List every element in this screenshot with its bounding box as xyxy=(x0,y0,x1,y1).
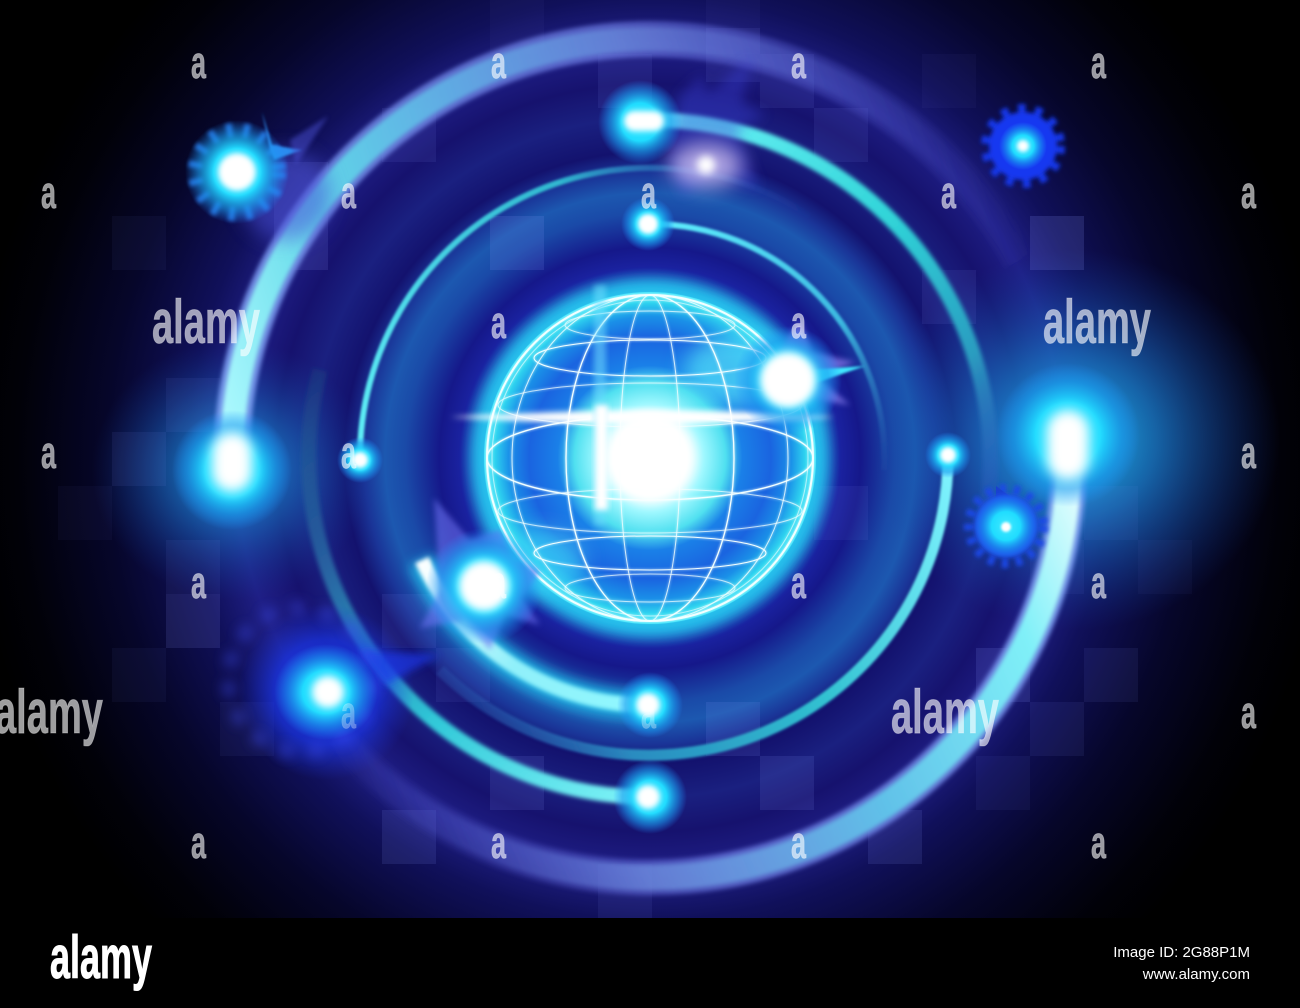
cyan blob toward burst xyxy=(685,335,785,405)
watermark: small letters: a xyxy=(341,427,357,478)
watermark: large alamy words: alamy xyxy=(1043,288,1151,357)
outer arc: upper xyxy=(232,39,1020,470)
node: left outer arc xyxy=(172,410,292,530)
watermark: small letters xyxy=(41,37,1257,868)
watermark: small letters: a xyxy=(491,297,507,348)
wireframe xyxy=(487,295,813,621)
middle arc: upper right xyxy=(660,110,996,486)
watermark: large alamy words: alamy xyxy=(891,678,999,747)
watermark: small letters: a xyxy=(41,427,57,478)
lens flare cross xyxy=(450,285,835,525)
watermark: large alamy words xyxy=(0,288,1151,747)
burst: lens flare near top arc xyxy=(668,57,766,195)
watermark: small letters: a xyxy=(641,167,657,218)
node: right outer arc xyxy=(996,363,1140,507)
watermark: small letters: a xyxy=(191,37,207,88)
watermark: small letters: a xyxy=(1241,427,1257,478)
watermark: small letters: a xyxy=(191,557,207,608)
globe fill xyxy=(484,292,816,624)
watermark: small letters: a xyxy=(191,817,207,868)
watermark: small letters: a xyxy=(1241,167,1257,218)
watermark: large alamy words: alamy xyxy=(0,678,103,747)
watermark: small letters: a xyxy=(491,817,507,868)
node: bottom middle arc xyxy=(613,760,687,834)
watermark: small letters: a xyxy=(1241,687,1257,738)
globe halo xyxy=(472,280,828,636)
footer logo: alamy xyxy=(50,924,152,991)
watermark: small letters: a xyxy=(41,167,57,218)
watermark: small letters: a xyxy=(791,37,807,88)
node: right inner arc xyxy=(925,432,971,478)
watermark: small letters: a xyxy=(941,167,957,218)
watermark: small letters: a xyxy=(791,557,807,608)
burst: right small xyxy=(969,486,1043,563)
inner arc: lower right xyxy=(440,455,948,755)
node: top inner arc xyxy=(621,197,675,251)
watermark: small letters: a xyxy=(641,687,657,738)
burst: bottom left xyxy=(228,604,440,780)
right side cyan haze xyxy=(924,266,1270,612)
footer site url: www.alamy.com xyxy=(1142,966,1250,983)
watermark: small letters: a xyxy=(1091,557,1107,608)
outer arc: lower xyxy=(335,432,1069,878)
left side cyan haze xyxy=(102,357,350,584)
inner arc: upper left xyxy=(356,164,770,449)
watermark: small letters: a xyxy=(1091,817,1107,868)
footer image id: Image ID: 2G88P1M xyxy=(1113,944,1250,961)
burst: lower left of globe xyxy=(420,498,542,650)
cyan blob lower left xyxy=(505,528,585,592)
burst: top right xyxy=(988,111,1058,181)
burst: right of globe xyxy=(734,320,865,434)
inner arc: lower left bright xyxy=(422,560,650,705)
inner arc: upper right xyxy=(648,224,884,470)
watermark: small letters: a xyxy=(341,167,357,218)
watermark: small letters: a xyxy=(1091,37,1107,88)
node: bottom inner arc xyxy=(617,672,683,738)
central star xyxy=(608,416,692,500)
watermark: small letters: a xyxy=(791,297,807,348)
watermark: small letters: a xyxy=(491,37,507,88)
globe xyxy=(450,280,835,636)
watermark: small letters: a xyxy=(341,687,357,738)
node: left inner arc xyxy=(337,437,383,483)
burst: top left xyxy=(185,112,330,240)
watermark: large alamy words: alamy xyxy=(152,288,260,357)
watermark: small letters: a xyxy=(491,557,507,608)
watermark: small letters: a xyxy=(791,817,807,868)
checker grid squares xyxy=(58,0,1192,918)
middle arc: lower left xyxy=(309,370,650,797)
node: top middle arc xyxy=(598,80,682,164)
